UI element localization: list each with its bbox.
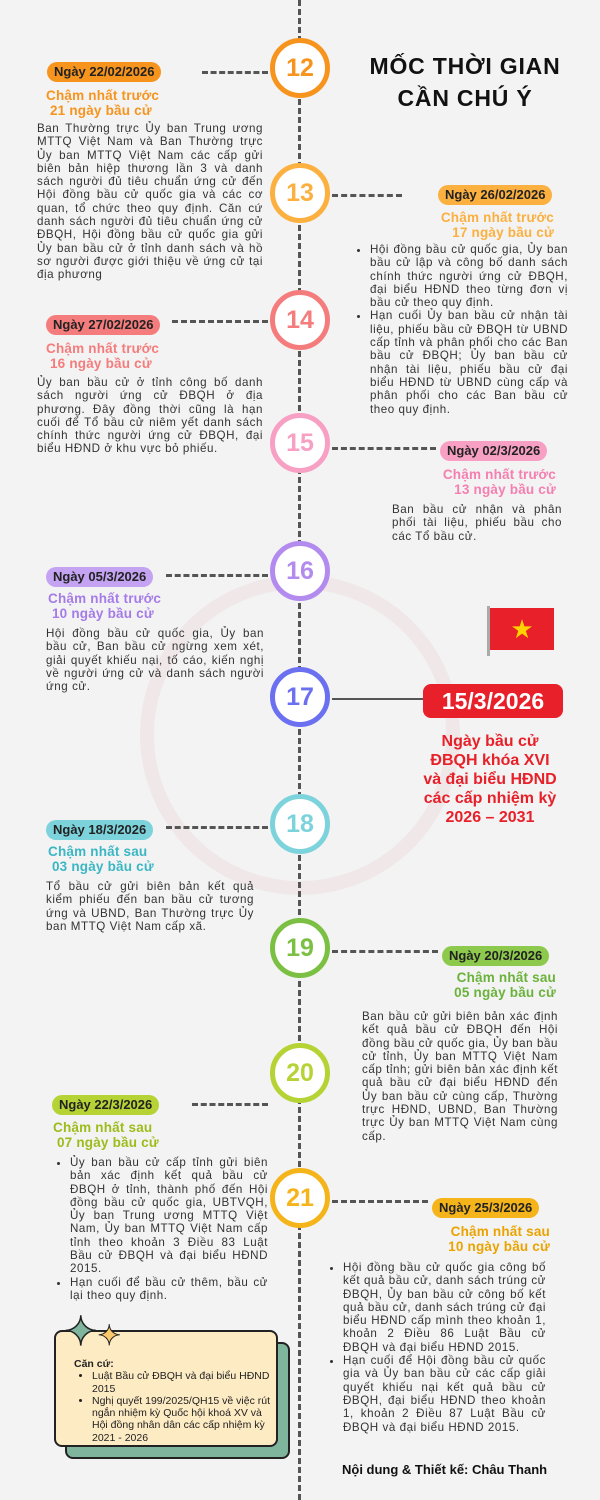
callout: election day: các cấp nhiệm kỳ	[424, 790, 556, 807]
milestone 12: Ngày 22/02/2026	[54, 64, 154, 79]
milestone 21: Chậm nhất sau	[451, 1224, 550, 1239]
milestone 14: Ủy ban bầu cử ở tỉnh công bố danh sách người ứng cử ĐBQH ở địa phương. Đây đồng thời cũng là hạn cuối để Tổ bầu cử niêm yết danh sách chính thức người ứng cử ĐBQH, đại biểu HĐND ở khu vực bỏ phiếu.	[37, 376, 263, 455]
callout: election day: và đại biểu HĐND	[423, 771, 557, 788]
credit: Nội dung & Thiết kế: Châu Thanh	[342, 1462, 547, 1477]
panel: legal basis: Luật Bầu cử ĐBQH và đại biểu HĐND 2015	[92, 1370, 269, 1395]
milestone 14: Ngày 27/02/2026	[53, 317, 153, 332]
milestone 13: Hạn cuối Ủy ban bầu cử nhận tài liệu, phiếu bầu cử ĐBQH từ UBND cấp tỉnh và phân phối cho các Ban bầu cử ĐBQH; Ủy ban bầu cử nhận tài liệu, phiếu bầu cử đại biểu HĐND từ UBND cùng cấp và phân phối cho các Ban bầu cử theo quy định.	[370, 309, 568, 416]
milestone 15: Chậm nhất trước	[443, 467, 556, 482]
milestone 14	[37, 290, 330, 455]
callout: election day: 2026 – 2031	[446, 809, 534, 826]
milestone 19: Ngày 20/3/2026	[449, 948, 542, 963]
milestone 21: 10 ngày bầu cử	[448, 1239, 550, 1254]
milestone 14: 14	[286, 306, 314, 334]
milestone 13: Ngày 26/02/2026	[445, 187, 545, 202]
callout: election day: Ngày bầu cử	[442, 733, 538, 750]
milestone 18: Ngày 18/3/2026	[53, 822, 146, 837]
title: MỐC THỜI GIAN	[369, 53, 560, 79]
callout: election day: 15/3/2026	[442, 688, 544, 714]
milestone 21: 21	[286, 1184, 314, 1212]
milestone 12: Chậm nhất trước	[46, 88, 159, 103]
callout: election day: ĐBQH khóa XVI	[430, 752, 550, 769]
milestone 19: 05 ngày bầu cử	[454, 985, 556, 1000]
milestone 13: Chậm nhất trước	[441, 210, 554, 225]
milestone 19: Chậm nhất sau	[457, 970, 556, 985]
milestone 15: Ban bầu cử nhận và phân phối tài liệu, phiếu bầu cho các Tổ bầu cử.	[392, 503, 562, 543]
callout: election day	[423, 684, 563, 826]
milestone 20: Hạn cuối để bầu cử thêm, bầu cử lại theo quy định.	[70, 1276, 268, 1302]
milestone 18: Chậm nhất sau	[48, 844, 147, 859]
milestone 21: Ngày 25/3/2026	[439, 1200, 532, 1215]
milestone 14: 16 ngày bầu cử	[50, 356, 152, 371]
milestone 15	[270, 413, 562, 543]
milestone 21	[270, 1168, 550, 1434]
title: CẦN CHÚ Ý	[398, 85, 532, 111]
watermark	[140, 575, 460, 895]
milestone 18: Tổ bầu cử gửi biên bản kết quả kiểm phiếu đến ban bầu cử tương ứng và UBND, Ban Thường trực Ủy ban MTTQ Việt Nam cấp xã.	[46, 880, 254, 933]
milestone 18: 03 ngày bầu cử	[52, 859, 154, 874]
milestone 12	[37, 38, 330, 281]
milestone 20: Ngày 22/3/2026	[59, 1097, 152, 1112]
milestone 19	[270, 918, 558, 1143]
milestone 18: 18	[286, 810, 314, 838]
milestone 19: Ban bầu cử gửi biên bản xác định kết quả bầu cử ĐBQH đến Hội đồng bầu cử quốc gia, Ủy ban bầu cử tỉnh, Ủy ban MTTQ Việt Nam cấp tỉnh; gửi biên bản xác định kết quả bầu cử đại biểu HĐND đến Ủy ban bầu cử cùng cấp, Thường trực HĐND, UBND, Ban Thường trực Ủy ban MTTQ Việt Nam cùng cấp.	[362, 1010, 558, 1143]
icon: flag: ★	[510, 614, 534, 644]
milestone 20	[52, 1043, 330, 1302]
milestone 13	[270, 163, 568, 416]
panel: legal basis: Căn cứ:	[74, 1358, 114, 1370]
panel: legal basis	[54, 1310, 290, 1459]
panel: legal basis: Nghị quyết 199/2025/QH15 về việc rút ngắn nhiệm kỳ Quốc hội khoá XV và Hội đồng nhân dân các cấp nhiệm kỳ 2021 - 2026	[92, 1395, 270, 1444]
milestone 18	[46, 794, 330, 933]
milestone 15: 13 ngày bầu cử	[454, 482, 556, 497]
milestone 17: 17	[286, 683, 314, 711]
milestone 21: Hạn cuối để Hội đồng bầu cử quốc gia và Ủy ban bầu cử các cấp giải quyết khiếu nại kết quả bầu cử ĐBQH, đại biểu HĐND theo khoản 1, khoản 2 Điều 87 Luật Bầu cử ĐBQH và đại biểu HĐND 2015.	[343, 1354, 546, 1434]
milestone 20: 07 ngày bầu cử	[57, 1135, 159, 1150]
milestone 16: 16	[286, 557, 314, 585]
milestone 21: Hội đồng bầu cử quốc gia công bố kết quả bầu cử, danh sách trúng cử ĐBQH, Ủy ban bầu cử công bố kết quả bầu cử, danh sách trúng cử đại biểu HĐND cấp mình theo khoản 1, khoản 2 Điều 86 Luật Bầu cử ĐBQH và đại biểu HĐND 2015.	[343, 1261, 546, 1354]
milestone 12: 21 ngày bầu cử	[50, 103, 152, 118]
milestone 20: 20	[286, 1059, 314, 1087]
milestone 16: Hội đồng bầu cử quốc gia, Ủy ban bầu cử, Ban bầu cử ngừng xem xét, giải quyết khiếu nại, tố cáo, kiến nghị về người ứng cử và danh sách người ứng cử.	[46, 627, 264, 693]
milestone 19: 19	[286, 934, 314, 962]
title	[369, 53, 560, 111]
milestone 16	[46, 541, 330, 693]
milestone 16: Ngày 05/3/2026	[53, 569, 146, 584]
icon: flag	[487, 606, 554, 656]
milestone 13: 13	[286, 179, 314, 207]
milestone 16: 10 ngày bầu cử	[52, 606, 154, 621]
milestone 15: Ngày 02/3/2026	[447, 443, 540, 458]
milestone 20: Chậm nhất sau	[53, 1120, 152, 1135]
timeline line	[298, 0, 301, 1500]
milestone 15: 15	[286, 429, 314, 457]
milestone 20: Ủy ban bầu cử cấp tỉnh gửi biên bản xác định kết quả bầu cử ĐBQH ở tỉnh, thành phố đến Hội đồng bầu cử quốc gia, UBTVQH, Ủy ban Trung ương MTTQ Việt Nam, Ủy ban MTTQ Việt Nam cấp tỉnh theo khoản 3 Điều 83 Luật Bầu cử ĐBQH và đại biểu HĐND 2015.	[70, 1156, 268, 1275]
milestone 13: 17 ngày bầu cử	[452, 225, 554, 240]
milestone 12: Ban Thường trực Ủy ban Trung ương MTTQ Việt Nam và Ban Thường trực Ủy ban MTTQ Việt Nam các cấp gửi biên bản hiệp thương lần 3 và danh sách người đủ tiêu chuẩn ứng cử đến Hội đồng bầu cử quốc gia và các cơ quan, tổ chức theo quy định. Căn cứ danh sách người đủ tiêu chuẩn ứng cử ĐBQH, Hội đồng bầu cử quốc gia gửi Ủy ban bầu cử ở tỉnh danh sách và hồ sơ người được giới thiệu về ứng cử tại địa phương	[37, 122, 263, 281]
milestone 13: Hội đồng bầu cử quốc gia, Ủy ban bầu cử lập và công bố danh sách chính thức người ứng cử ĐBQH, đại biểu HĐND theo từng đơn vị bầu cử theo quy định.	[370, 243, 568, 309]
milestone 14: Chậm nhất trước	[46, 341, 159, 356]
milestone 16: Chậm nhất trước	[48, 591, 161, 606]
icon: sparkles: ✦✦	[64, 1310, 121, 1354]
milestone 12: 12	[286, 54, 314, 82]
